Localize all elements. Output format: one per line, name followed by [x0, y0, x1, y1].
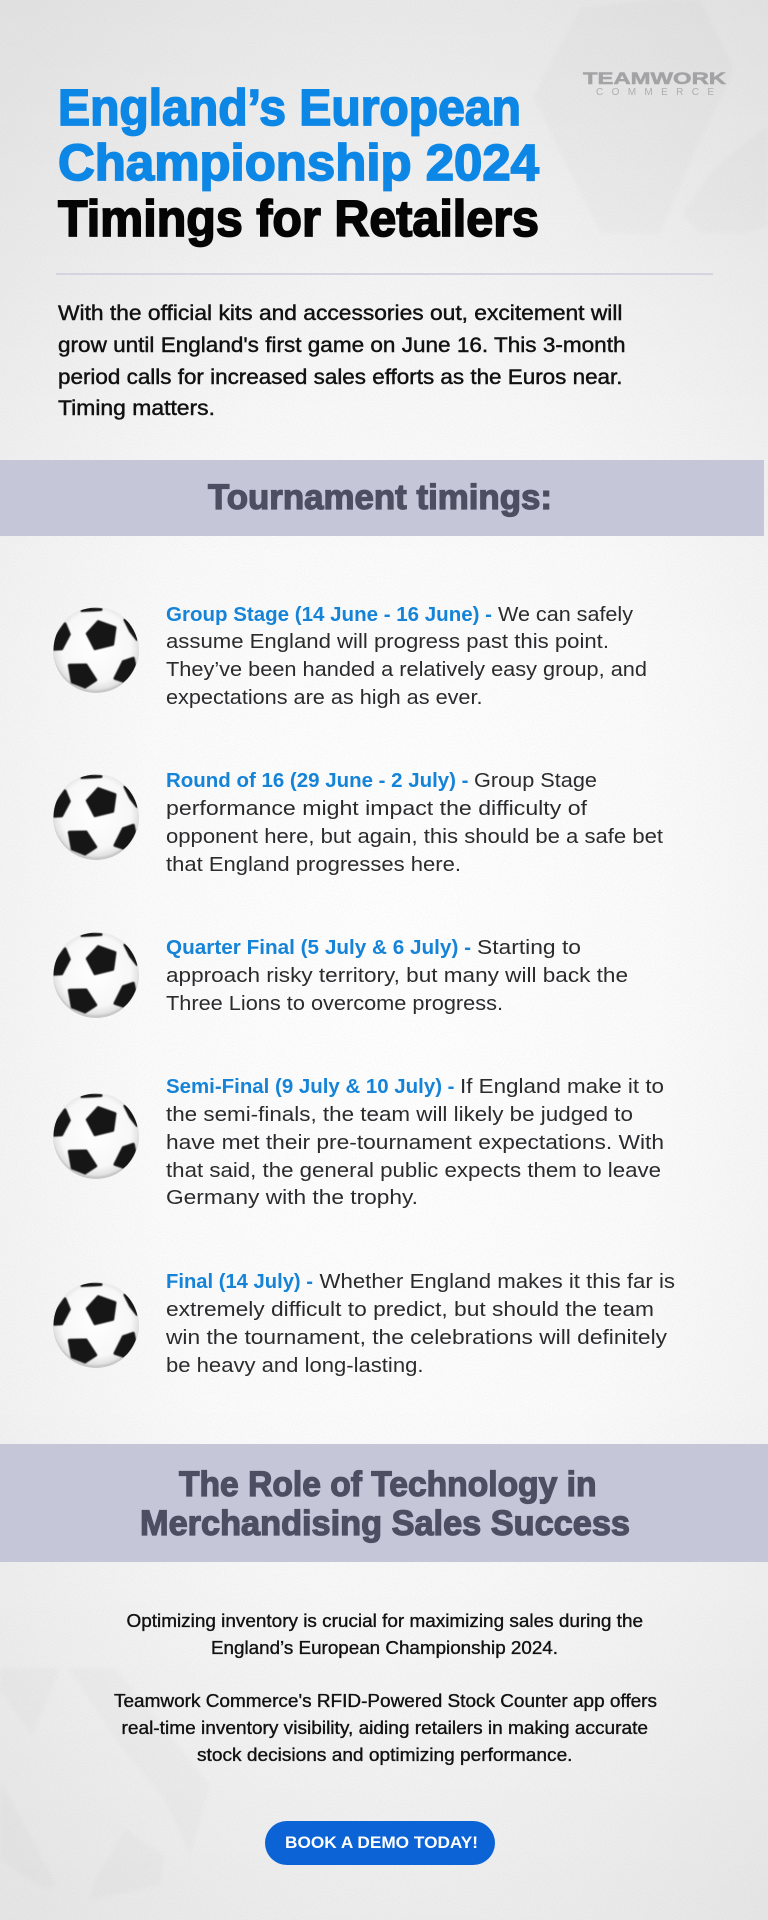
- text block: RFID stock counter: [114, 1691, 657, 1765]
- button: book a demo: BOOK A DEMO TODAY!: [285, 1833, 478, 1852]
- text: quarter final: Quarter Final (5 July & 6 July) -: [166, 937, 471, 959]
- text: semi-final: Germany with the trophy.: [166, 1187, 418, 1209]
- panel: technology heading band: Merchandising Sales Success: [140, 1504, 630, 1543]
- panel: tournament timings heading band: [0, 460, 764, 536]
- text: quarter final: Three Lions to overcome progress.: [166, 993, 503, 1015]
- intro paragraph: grow until England's first game on June 16. This 3-month: [58, 334, 626, 357]
- panel: technology heading band: [0, 1444, 768, 1562]
- text: final: Final (14 July) -: [166, 1271, 313, 1293]
- text block: RFID stock counter: real-time inventory visibility, aiding retailers in making accurate: [122, 1718, 648, 1738]
- title: Timings for Retailers: [58, 190, 539, 247]
- text: round of 16: performance might impact the difficulty of: [166, 798, 587, 820]
- text: final: [165, 1271, 675, 1377]
- text: semi-final: Semi-Final (9 July & 10 July) -: [166, 1076, 454, 1098]
- text: group stage: They’ve been handed a relatively easy group, and: [166, 659, 647, 681]
- panel: tournament timings heading band: Tournament timings:: [208, 478, 552, 517]
- panel: semi-final: [53, 1076, 664, 1209]
- button: book a demo: [265, 1821, 495, 1865]
- text: final: extremely difficult to predict, but should the team: [166, 1299, 654, 1321]
- intro paragraph: With the official kits and accessories out, excitement will: [58, 302, 622, 325]
- icon: football: [53, 1282, 139, 1368]
- intro paragraph: Timing matters.: [58, 397, 215, 420]
- watermark: bottom left: [0, 1668, 210, 1900]
- icon: football: [53, 607, 139, 693]
- text: final: be heavy and long-lasting.: [166, 1355, 424, 1377]
- text: quarter final: Starting to: [477, 937, 581, 959]
- title: England’s European: [58, 79, 521, 136]
- text: semi-final: If England make it to: [460, 1076, 664, 1098]
- text: group stage: We can safely: [498, 604, 633, 626]
- logo: Teamwork Commerce: TEAMWORK: [583, 69, 727, 88]
- text: round of 16: that England progresses here.: [166, 854, 461, 876]
- text block: RFID stock counter: stock decisions and optimizing performance.: [197, 1745, 572, 1765]
- text: semi-final: the semi-finals, the team will likely be judged to: [166, 1104, 633, 1126]
- title: Championship 2024: [58, 134, 540, 191]
- text: final: Whether England makes it this far is: [320, 1271, 675, 1293]
- intro paragraph: [58, 302, 626, 420]
- logo: Teamwork Commerce: [583, 69, 727, 98]
- logo: Teamwork Commerce: COMMERCE: [596, 87, 714, 98]
- text block: RFID stock counter: Teamwork Commerce's RFID-Powered Stock Counter app offers: [114, 1691, 657, 1711]
- watermark: top right: [533, 0, 768, 233]
- icon: football: [53, 932, 139, 1018]
- text block: optimizing inventory: [126, 1611, 643, 1658]
- text: semi-final: have met their pre-tournament expectations. With: [166, 1132, 664, 1154]
- text block: optimizing inventory: England’s European Championship 2024.: [211, 1638, 558, 1658]
- text: group stage: expectations are as high as ever.: [166, 687, 482, 709]
- text: group stage: assume England will progress past this point.: [166, 631, 609, 653]
- text: round of 16: [166, 770, 663, 876]
- text block: optimizing inventory: Optimizing inventory is crucial for maximizing sales during the: [126, 1611, 643, 1631]
- title: [58, 79, 540, 247]
- panel: group stage: [53, 604, 647, 709]
- text: round of 16: Group Stage: [474, 770, 597, 792]
- text: group stage: Group Stage (14 June - 16 June) -: [166, 604, 492, 626]
- text: final: win the tournament, the celebrations will definitely: [165, 1327, 667, 1349]
- text: semi-final: that said, the general public expects them to leave: [166, 1160, 661, 1182]
- icon: football: [53, 774, 139, 860]
- text: round of 16: Round of 16 (29 June - 2 July) -: [166, 770, 468, 792]
- text: group stage: [166, 604, 647, 709]
- text: semi-final: [166, 1076, 664, 1209]
- intro paragraph: period calls for increased sales efforts as the Euros near.: [58, 366, 622, 389]
- panel: technology heading band: The Role of Technology in: [179, 1465, 596, 1504]
- text: quarter final: [166, 937, 628, 1015]
- panel: round of 16: [53, 770, 663, 876]
- panel: quarter final: [53, 932, 628, 1018]
- text: quarter final: approach risky territory, but many will back the: [166, 965, 628, 987]
- text: round of 16: opponent here, but again, this should be a safe bet: [166, 826, 663, 848]
- panel: final: [53, 1271, 675, 1377]
- icon: football: [53, 1093, 139, 1179]
